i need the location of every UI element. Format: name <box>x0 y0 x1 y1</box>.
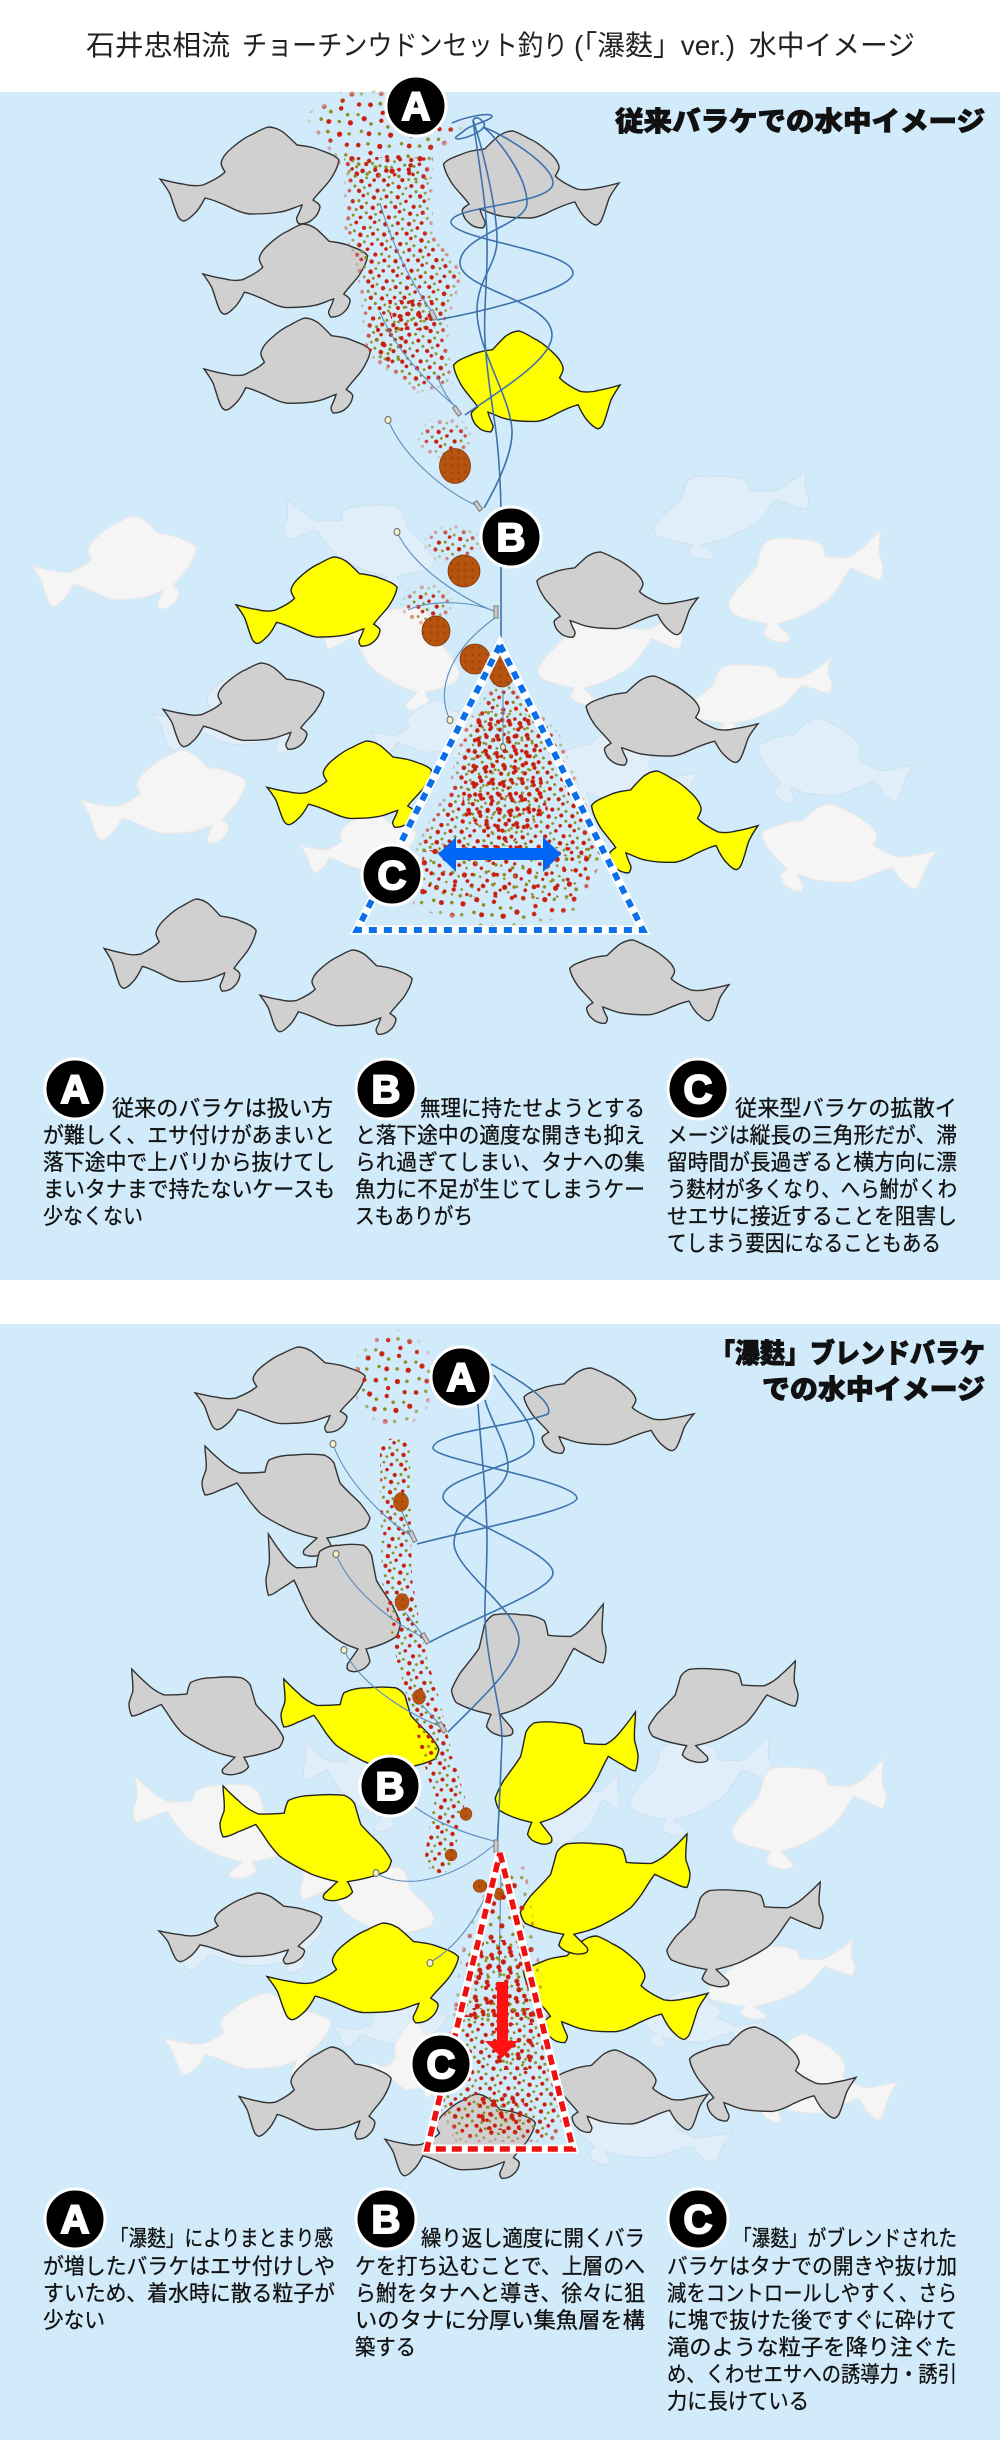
badge B: B <box>376 1765 404 1809</box>
note C: 力に長けている <box>667 2389 809 2414</box>
badge A <box>386 76 446 136</box>
note C: てしまう要因になることもある <box>667 1231 941 1256</box>
badge B <box>481 507 541 567</box>
dashed triangle: diffusion range <box>357 645 643 930</box>
note C: に塊で抜けた後ですぐに砕けて <box>667 2308 957 2333</box>
note A: が増したバラケはエサ付けしや <box>43 2254 335 2279</box>
note A <box>43 2189 335 2333</box>
note B: ら鮒をタナへと導き、徐々に狙 <box>355 2281 645 2306</box>
note C: 留時間が長過ぎると横方向に漂 <box>667 1150 957 1175</box>
badge A: A <box>402 85 430 129</box>
note B: いのタナに分厚い集魚層を構 <box>355 2308 645 2333</box>
bait balls <box>394 1492 504 1900</box>
bait particle cloud A <box>353 1329 430 1424</box>
note B: と落下途中の適度な開きも抑え <box>355 1123 645 1148</box>
badge B <box>360 1756 420 1816</box>
background fish school <box>32 469 937 891</box>
note A: 従来のバラケは扱い方 <box>112 1096 333 1121</box>
note C: 減をコントロールしやすく、さら <box>667 2281 957 2306</box>
note C: め、くわせエサへの誘導力・誘引 <box>667 2362 957 2387</box>
note A <box>43 1059 335 1229</box>
note A: 「瀑麩」によりまとまり感 <box>110 2226 333 2251</box>
title <box>86 30 915 61</box>
note B: ケを打ち込むことで、上層のへ <box>355 2254 645 2279</box>
note C: C <box>684 2198 712 2242</box>
note B: られ過ぎてしまい、タナへの集 <box>355 1150 645 1175</box>
note B: B <box>372 1068 400 1112</box>
note A: 少ない <box>43 2308 105 2333</box>
panel heading: での水中イメージ <box>762 1375 985 1405</box>
badge C: C <box>427 2043 455 2087</box>
note C: 滝のような粒子を降り注ぐた <box>667 2335 957 2360</box>
badge B: B <box>497 516 525 560</box>
note C <box>667 1059 957 1256</box>
panel heading: 「瀑麩」ブレンドバラケ <box>710 1338 985 1369</box>
note B: 築する <box>355 2335 416 2360</box>
note C <box>667 2189 957 2414</box>
panel: conventional bait underwater image <box>0 76 1000 1280</box>
panel heading <box>710 1338 985 1405</box>
title: チョーチンウドンセット釣り <box>242 30 568 61</box>
background fish school <box>133 1736 898 2165</box>
note B: 魚力に不足が生じてしまうケー <box>355 1177 645 1202</box>
badge C: C <box>378 854 406 898</box>
note B: 無理に持たせようとする <box>420 1096 645 1121</box>
fish school: gray and yellow <box>104 127 758 1034</box>
note C: せエサに接近することを阻害し <box>667 1204 957 1229</box>
bait balls <box>422 448 515 687</box>
note A: 落下途中で上バリから抜けてし <box>43 1150 335 1175</box>
fish school: gray and yellow <box>129 1347 856 2178</box>
note C: バラケはタナでの開きや抜け加 <box>667 2254 957 2279</box>
note C: メージは縦長の三角形だが、滞 <box>667 1123 957 1148</box>
badge C <box>362 845 422 905</box>
note B: スもありがち <box>355 1204 473 1229</box>
panel background <box>0 1324 1000 2440</box>
arrow: horizontal spread <box>438 837 561 872</box>
title: (「瀑麩」ver.) <box>574 30 735 61</box>
badge A: A <box>447 1356 475 1400</box>
fishing lines and hooks <box>330 1364 577 1978</box>
fishing lines and hooks <box>380 115 573 750</box>
note C: 「瀑麩」がブレンドされた <box>733 2226 957 2251</box>
note C: C <box>684 1068 712 1112</box>
note A: すいため、着水時に散る粒子が <box>43 2281 335 2306</box>
note C: う麩材が多くなり、へら鮒がくわ <box>667 1177 957 1202</box>
bait particle clouds, panel 1 <box>315 98 597 923</box>
falling bait particle column <box>395 1453 450 1858</box>
note B: 繰り返し適度に開くバラ <box>421 2226 645 2251</box>
title: 石井忠相流 <box>86 30 230 61</box>
note C: 従来型バラケの拡散イ <box>735 1096 957 1121</box>
note A: まいタナまで持たないケースも <box>43 1177 335 1202</box>
panel background <box>0 92 1000 1280</box>
note A: A <box>61 1068 89 1112</box>
note A: A <box>61 2198 89 2242</box>
note A: が難しく、エサ付けがあまいと <box>43 1123 335 1148</box>
arrow: downward fall <box>485 1982 518 2058</box>
note B: B <box>372 2198 400 2242</box>
badge A <box>431 1347 491 1407</box>
panel: blended bait underwater image <box>0 1324 1000 2440</box>
note B <box>355 2189 645 2360</box>
dashed triangle: falling range <box>427 1853 573 2149</box>
note B <box>355 1059 645 1229</box>
title: 水中イメージ <box>749 30 915 61</box>
badge C <box>411 2034 471 2094</box>
bait particle cloud C <box>443 1873 557 2135</box>
note A: 少なくない <box>43 1204 143 1229</box>
panel heading: 従来バラケでの水中イメージ <box>615 107 985 137</box>
